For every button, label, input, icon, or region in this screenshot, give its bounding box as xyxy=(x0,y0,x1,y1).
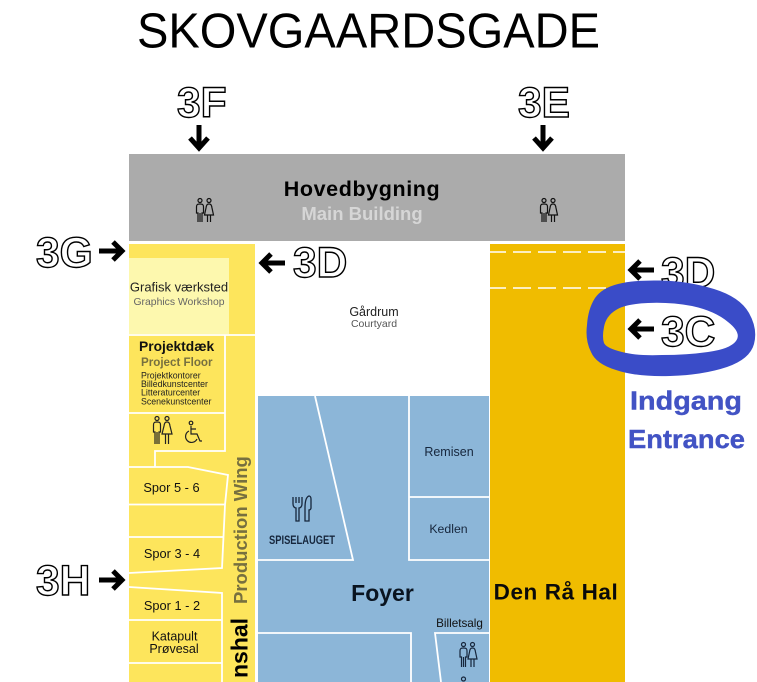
label: Katapult Prøvesal: Prøvesal xyxy=(149,642,199,656)
icon: toilets west xyxy=(196,198,214,222)
panel: production wing xyxy=(129,244,255,682)
panel: main building xyxy=(129,154,625,241)
label: Produktionshal (cropped by frame): nshal xyxy=(226,618,252,678)
icon: wheelchair foyer xyxy=(462,677,466,681)
text: courtyard: Courtyard xyxy=(351,318,397,330)
text: Indgang: Indgang xyxy=(630,386,742,416)
icon: blue hand-drawn circle xyxy=(586,280,755,376)
label: 3E: 3E xyxy=(518,80,570,127)
label: 3G: 3G xyxy=(36,230,93,277)
label: Spor 5 - 6: Spor 5 - 6 xyxy=(143,480,200,495)
label: 3F: 3F xyxy=(177,80,227,127)
icon: toilets project floor xyxy=(154,416,172,444)
label: 3C: 3C xyxy=(661,309,715,356)
room: project floor: Project Floor xyxy=(141,356,213,369)
label: Foyer: Foyer xyxy=(351,580,414,606)
label: 3D east: 3D xyxy=(661,250,715,297)
icon: toilets east xyxy=(540,198,558,222)
arrow: 3E xyxy=(534,125,552,148)
arrow: 3D east xyxy=(631,261,654,279)
text: courtyard: Gårdrum xyxy=(349,305,399,319)
arrow: 3C xyxy=(631,320,654,338)
icon: wheelchair xyxy=(186,421,202,442)
label: 3D west: 3D xyxy=(293,240,347,287)
label: Katapult Prøvesal xyxy=(149,630,199,656)
room: graphics workshop: Grafisk værksted xyxy=(130,280,228,294)
label: Spor 3 - 4: Spor 3 - 4 xyxy=(144,546,200,561)
room: project floor: Projektdæk xyxy=(139,339,214,354)
foyer walls xyxy=(258,396,489,682)
label: Spor 1 - 2: Spor 1 - 2 xyxy=(144,598,200,613)
room: project floor: Scenekunstcenter xyxy=(141,396,211,406)
room: project floor: Litteraturcenter xyxy=(141,388,200,398)
label: Production Wing: Production Wing xyxy=(230,456,251,604)
subheading: Main Building: Main Building xyxy=(301,203,423,224)
room: graphics workshop: Graphics Workshop xyxy=(133,297,225,308)
text: Entrance: Entrance xyxy=(628,424,745,454)
room: project floor: Projektkontorer xyxy=(141,370,201,380)
icon: toilets foyer xyxy=(460,642,477,667)
heading: Hovedbygning: Hovedbygning xyxy=(284,177,440,201)
arrow: 3D west xyxy=(262,254,285,272)
label: 3H: 3H xyxy=(36,558,90,605)
wing walls xyxy=(129,335,255,682)
room: graphics workshop xyxy=(129,258,229,334)
label: Billetsalg: Billetsalg xyxy=(436,617,483,630)
panel: Den Rå Hal xyxy=(490,244,625,682)
room: project floor xyxy=(139,339,214,406)
label: Kedlen: Kedlen xyxy=(429,522,468,536)
arrow: 3G xyxy=(99,242,122,260)
panel: foyer xyxy=(258,396,489,682)
label: Remisen: Remisen xyxy=(424,445,474,459)
text: courtyard xyxy=(349,305,399,330)
label: Den Rå Hal: Den Rå Hal xyxy=(494,580,618,604)
label: Katapult Prøvesal: Katapult xyxy=(152,630,198,644)
room: project floor: Billedkunstcenter xyxy=(141,379,208,389)
title: SKOVGAARDSGADE xyxy=(137,4,600,58)
arrow: 3F xyxy=(190,125,208,148)
label: Spiselauget: SPISELAUGET xyxy=(269,533,336,547)
arrow: 3H xyxy=(99,571,122,589)
icon: cutlery xyxy=(293,496,311,521)
